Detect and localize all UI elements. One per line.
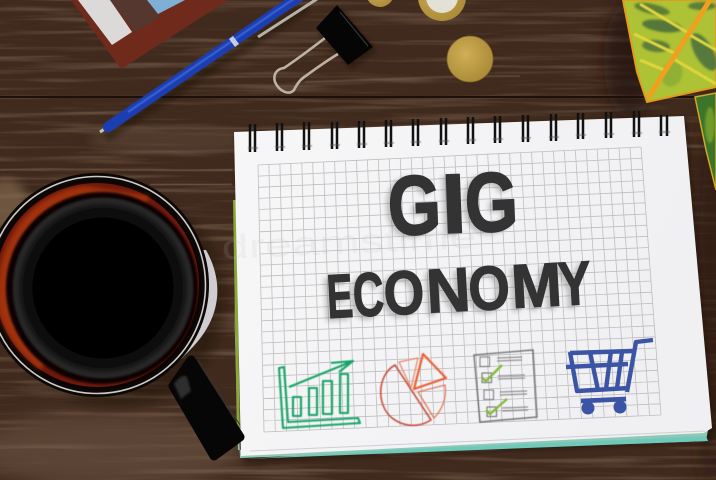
heading shadow: GIG ECONOMY: C	[347, 263, 382, 334]
heading: ECONOMY: N	[424, 255, 472, 327]
heading shadow: GIG ECONOMY: E	[321, 265, 351, 335]
blue pen	[100, 0, 317, 137]
heading: GIG: G	[386, 157, 443, 253]
page	[234, 116, 712, 456]
heading shadow: GIG ECONOMY: M	[505, 254, 560, 325]
notebook cover edge	[234, 300, 708, 458]
coins	[366, 0, 493, 82]
mug rim and coffee	[0, 173, 209, 397]
watermark: dreamstime	[221, 218, 477, 267]
heading: GIG: I	[440, 156, 468, 251]
notebook shadow	[236, 118, 714, 462]
heading shadow: GIG ECONOMY: I	[436, 158, 464, 253]
icon: shopping cart	[566, 340, 653, 414]
heading: ECONOMY: O	[382, 258, 426, 329]
icon: green growth chart	[279, 361, 360, 428]
mug outer side	[170, 250, 217, 370]
heading: ECONOMY: E	[325, 262, 355, 332]
graph paper grid	[258, 147, 661, 432]
icon: pie chart	[381, 354, 446, 425]
heading: ECONOMY: M	[509, 251, 564, 322]
heading shadow: GIG ECONOMY	[321, 156, 589, 335]
heading: ECONOMY: C	[351, 260, 386, 331]
heading shadow: GIG ECONOMY: N	[420, 258, 468, 330]
heading shadow: GIG ECONOMY: G	[382, 159, 439, 255]
heading: ECONOMY: Y	[556, 249, 593, 320]
spiral binding rings	[248, 111, 670, 152]
binder clip	[274, 5, 376, 93]
coffee mug	[0, 173, 240, 456]
croton leaf, small	[695, 93, 716, 190]
heading: ECONOMY: O	[467, 253, 512, 324]
heading: GIG: G	[463, 154, 520, 250]
spiral notebook	[221, 111, 714, 462]
mug handle	[173, 360, 240, 456]
croton leaf, large	[623, 0, 716, 102]
heading shadow: GIG ECONOMY: G	[459, 156, 516, 252]
wallet with cards	[71, 0, 228, 69]
heading shadow: GIG ECONOMY: O	[378, 261, 422, 332]
heading shadow: GIG ECONOMY: Y	[552, 252, 589, 323]
icon: checklist	[474, 350, 537, 422]
heading shadow: GIG ECONOMY: O	[463, 256, 508, 327]
